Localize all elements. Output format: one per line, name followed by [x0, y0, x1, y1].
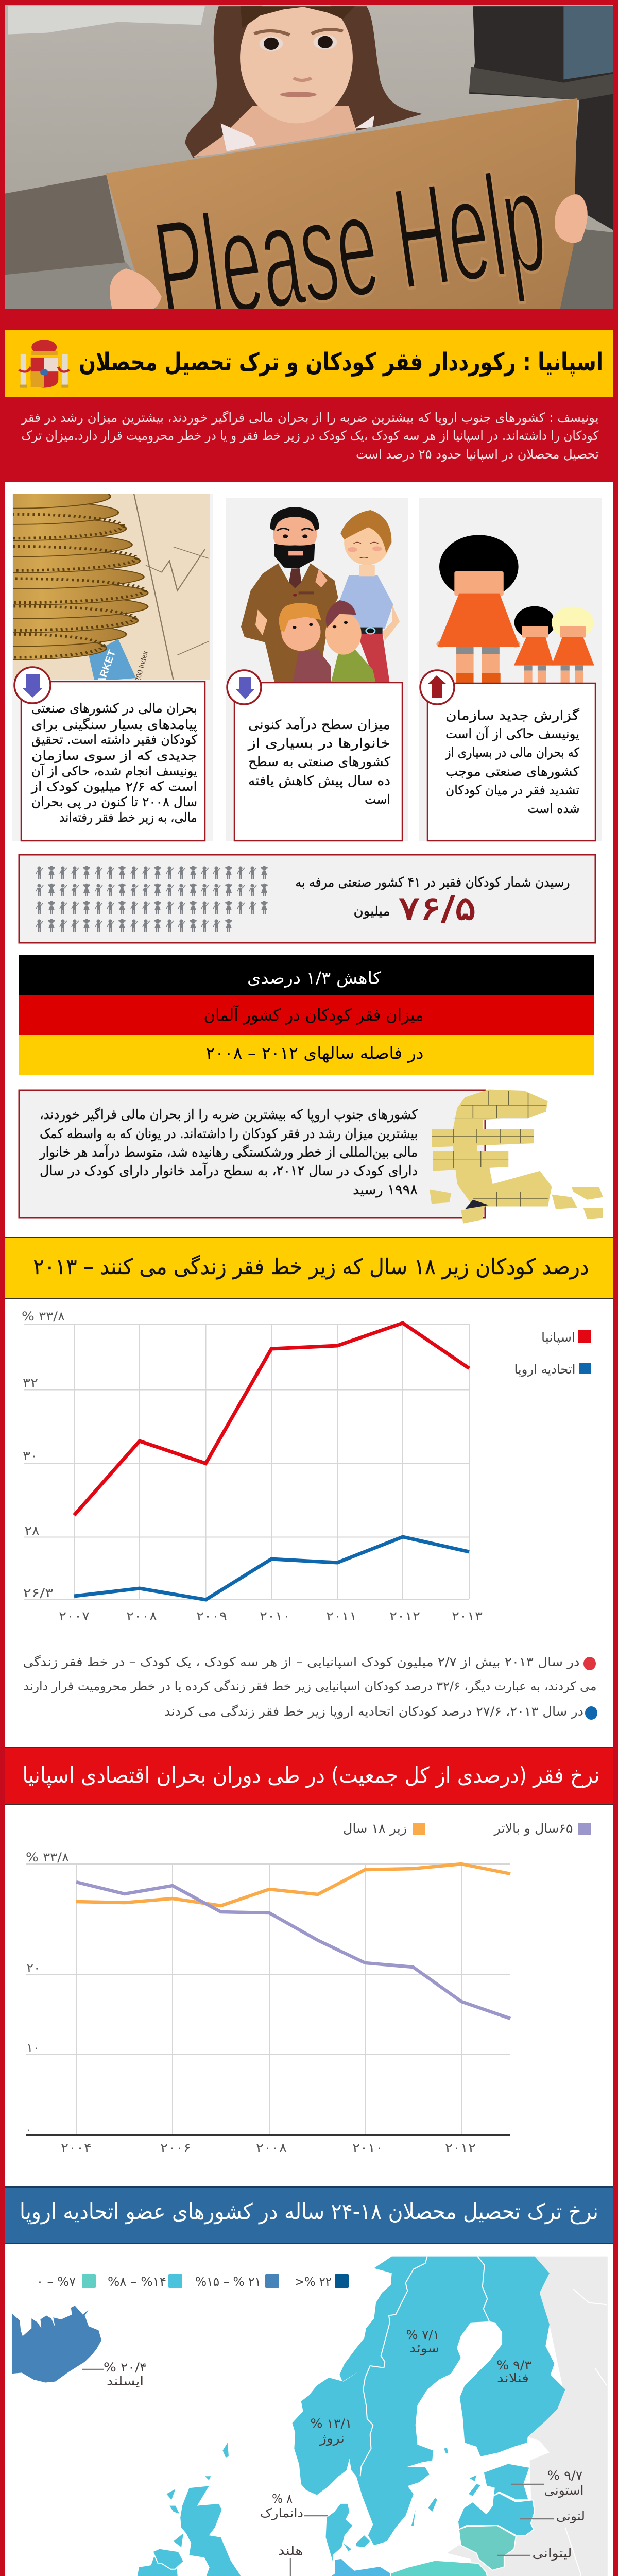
icon: mother body	[357, 634, 390, 683]
series: EU	[74, 1537, 469, 1600]
line chart: poverty rate by age	[26, 1821, 591, 2155]
chart notes: می کردند، به عبارت دیگر، ۳۲/۶ درصد کودکان اسپانیایی زیر خط فقر زندگی کرده یا در خطر محرومیت قرار دارند	[24, 1679, 596, 1693]
y axis labels: ۲۰	[27, 1961, 40, 1975]
section header: poverty rate in Spain	[5, 1747, 613, 1805]
paragraph: یونیسف انجام شده، حاکی از آن	[31, 763, 197, 778]
y axis labels: % ۳۳/۸	[26, 1850, 69, 1865]
panel: family income	[226, 498, 408, 841]
text box	[427, 683, 595, 841]
leader lines	[82, 2369, 554, 2576]
icon: father head	[273, 514, 317, 554]
icon: up arrow in circle	[420, 670, 454, 704]
icon: lower pavement	[5, 262, 162, 311]
paragraph: کشورهای صنعتی به سطح	[248, 754, 390, 770]
flag text three: در فاصله سالهای ۲۰۱۲ – ۲۰۰۸	[205, 1043, 423, 1063]
icon: rock step	[469, 67, 615, 100]
chart notes: در سال ۲۰۱۳ بیش از ۲/۷ میلیون کودک اسپانیایی – از هر سه کودک ، یک کودک – در خط فقر زندگی	[23, 1655, 580, 1669]
paragraph: تشدید فقر در میان کودکان	[445, 783, 579, 798]
icon: hair	[185, 6, 422, 158]
x axis labels	[61, 2141, 476, 2155]
paragraph: کشورهای صنعتی موجب	[445, 764, 579, 779]
legend: ۶۵سال و بالاتر	[493, 1821, 573, 1836]
label: Lithuania: لیتوانی	[533, 2546, 572, 2561]
country: United Kingdom	[166, 2443, 259, 2576]
border: Norway Sweden	[360, 2257, 427, 2476]
paragraph: پیامدهای بسیار سنگینی برای	[31, 717, 197, 732]
label: Estonia	[544, 2468, 584, 2498]
x axis labels: ۲۰۰۹	[196, 1609, 227, 1623]
panel: coins and financial crisis	[0, 484, 213, 841]
paragraph	[247, 717, 390, 807]
section header: children under 18: درصد کودکان زیر ۱۸ سال که زیر خط فقر زندگی می کنند – ۲۰۱۳	[33, 1254, 589, 1279]
x axis labels: ۲۰۰۸	[256, 2141, 287, 2155]
country: Poland	[389, 2561, 490, 2576]
legend	[37, 2274, 349, 2289]
icon: red bullet	[583, 1657, 596, 1670]
pictogram: rows of children	[36, 866, 268, 932]
chart notes	[23, 1655, 597, 1720]
paragraph: بیشترین میزان رشد در فقر کودکان را داشته‌اند. در یونان که به واسطه کمک	[40, 1126, 418, 1142]
icon: down arrow in circle	[14, 667, 50, 703]
photo: coins on newspaper: MARKET	[92, 649, 118, 694]
paragraph: مالی، به زیر خط فقر رفته‌اند	[60, 810, 197, 825]
map: non-member land	[150, 2257, 608, 2576]
text box	[234, 683, 402, 841]
y axis labels: % ۳۳/۸	[22, 1309, 65, 1324]
y axis labels: ۰	[26, 2123, 31, 2137]
icon: left hand	[110, 268, 162, 311]
stat unit: میلیون	[353, 904, 390, 919]
icon: boy two	[331, 649, 376, 683]
icon: eyes and mouth	[254, 29, 343, 97]
chart grid	[24, 1324, 469, 1599]
x axis labels: ۲۰۱۰	[260, 1609, 290, 1623]
label: Netherlands: هلند	[278, 2544, 303, 2558]
icon: curb	[5, 175, 126, 275]
icon: child with blond hair	[552, 607, 594, 638]
icon: right hand	[555, 194, 588, 243]
map: inland lakes and borders	[555, 2289, 607, 2576]
paragraph: است	[365, 792, 390, 807]
label: Denmark: % ۸	[272, 2492, 293, 2506]
icon: fringe	[241, 6, 355, 28]
icon: mother figure	[439, 535, 519, 599]
label: Norway	[310, 2416, 352, 2446]
paragraph	[444, 708, 580, 816]
icon: crumbling euro of bricks	[430, 1089, 603, 1224]
x axis labels: ۲۰۱۰	[352, 2141, 383, 2155]
paragraph: گزارش جدید سازمان	[445, 708, 579, 723]
label: Sweden	[406, 2328, 440, 2355]
label: Norway: % ۱۳/۱	[310, 2416, 352, 2431]
country: Estonia	[484, 2463, 530, 2500]
section header: school dropout rate	[5, 2186, 613, 2244]
country: Finland	[460, 2257, 565, 2456]
section header: school dropout rate: نرخ ترک تحصیل محصلان ۱۸-۲۴ ساله در کشورهای عضو اتحادیه اروپا	[20, 2199, 598, 2225]
paragraph: جدیدی که از سوی سازمان	[31, 748, 197, 763]
icon: down arrow in circle	[227, 670, 261, 704]
icon: boy one	[293, 649, 331, 683]
legend	[343, 1821, 591, 1836]
paragraph: ده سال پیش کاهش یافته	[248, 773, 390, 788]
legend	[514, 1330, 591, 1377]
y axis labels: ۲۸	[25, 1523, 40, 1538]
x axis labels: ۲۰۱۱	[326, 1609, 357, 1623]
icon: blue bullet	[585, 1706, 597, 1720]
stat caption: رسیدن شمار کودکان فقیر در ۴۱ کشور صنعتی مرفه به	[296, 875, 570, 890]
intro paragraph	[21, 410, 599, 462]
paragraph: کشورهای جنوب اروپا که بیشترین ضربه را از بحران مالی فراگیر خوردند،	[40, 1107, 418, 1123]
label: Finland	[496, 2358, 531, 2385]
illustration: mother and two children	[436, 535, 594, 683]
label: Norway: نروژ	[319, 2431, 345, 2446]
paragraph: دارای کودک در سال ۲۰۱۲، به سطح درآمد خانوار دارای کودک در سال	[40, 1162, 418, 1179]
icon: neck	[193, 106, 357, 157]
icon: cardboard sign	[106, 98, 577, 311]
y axis labels: ۲۶/۳	[23, 1586, 54, 1600]
y axis labels	[22, 1309, 65, 1600]
paragraph	[39, 1107, 418, 1198]
icon: rock blue side	[563, 6, 615, 80]
label: Finland: فنلاند	[497, 2371, 529, 2385]
x axis labels: ۲۰۰۴	[61, 2141, 92, 2155]
paragraph: میزان سطح درآمد کنونی	[248, 717, 390, 733]
label: Denmark	[260, 2492, 303, 2520]
border: Sweden Finland	[477, 2257, 489, 2321]
label: Iceland: ایسلند	[107, 2374, 144, 2388]
y axis labels: ۱۰	[27, 2041, 39, 2055]
photo: coins on newspaper	[13, 494, 210, 680]
series: under 18	[76, 1864, 510, 1906]
legend: ۰ – %۷	[37, 2275, 76, 2289]
x axis labels	[59, 1609, 483, 1623]
icon: light patch on pavement	[8, 6, 205, 35]
country: Denmark	[326, 2504, 370, 2561]
y axis labels: ۳۲	[23, 1376, 38, 1390]
paragraph: یونیسف حاکی از آن است	[445, 726, 579, 741]
icon: shirt	[221, 115, 374, 151]
paragraph: بحران مالی در کشورهای صنعتی	[31, 701, 197, 716]
label: Denmark: دانمارک	[260, 2506, 303, 2520]
label: Sweden: % ۷/۱	[406, 2328, 440, 2342]
text box	[21, 682, 205, 841]
islands: Baltic	[411, 2448, 480, 2526]
icon: mother head	[344, 520, 390, 565]
x axis labels: ۲۰۱۳	[452, 1609, 483, 1623]
panel: 76.5 million poor children	[19, 855, 595, 943]
legend: زیر ۱۸ سال	[343, 1821, 407, 1836]
icon: father coat	[241, 563, 338, 683]
panel: Germany flag statistic	[19, 955, 594, 1075]
hero photo: girl holding Please Help sign	[5, 5, 613, 309]
label: Iceland	[104, 2360, 147, 2388]
legend: >% ۲۲	[295, 2275, 332, 2289]
series: Spain	[74, 1323, 469, 1515]
photo: coins on newspaper: ASX 200 Index	[129, 650, 149, 699]
line chart: children in poverty Spain vs EU	[22, 1309, 591, 1623]
country: Norway and Sweden	[292, 2257, 489, 2545]
legend: %۸ – %۱۴	[108, 2275, 166, 2289]
y axis labels	[26, 1850, 69, 2137]
y axis labels: ۳۰	[23, 1449, 38, 1463]
paragraph: شده است	[527, 801, 580, 816]
intro paragraph: تحصیل محصلان در اسپانیا حدود ۲۵ درصد است	[356, 447, 599, 462]
paragraph: خانوارها در بسیاری از	[247, 736, 390, 751]
icon: Spanish coat of arms	[19, 340, 70, 388]
title banner	[5, 330, 613, 397]
icon: right pavement	[560, 229, 613, 309]
flag text two: میزان فقر کودکان در کشور آلمان	[204, 1005, 423, 1025]
paragraph: که بحران مالی در بسیاری از	[444, 745, 579, 760]
icon: face	[240, 0, 353, 123]
map: school dropout in Europe	[12, 2257, 608, 2576]
paragraph: کودکان فقیر داشته است. تحقیق	[31, 732, 197, 747]
panel: southern Europe note with euro bricks	[19, 1089, 603, 1224]
label: Estonia: استونی	[544, 2483, 584, 2498]
x axis labels: ۲۰۱۲	[389, 1609, 420, 1623]
x axis labels: ۲۰۰۶	[160, 2141, 191, 2155]
x axis labels: ۲۰۰۷	[59, 1609, 90, 1623]
paragraph	[30, 701, 197, 825]
intro paragraph: یونیسف : کشورهای جنوب اروپا که بیشترین ضربه را از بحران مالی فراگیر خوردند، بیشترین میزان رشد در فقر	[21, 410, 599, 426]
x axis labels: ۲۰۰۸	[126, 1609, 157, 1623]
section header: children under 18	[5, 1237, 613, 1299]
country: Germany	[303, 2558, 397, 2576]
chart grid	[26, 1864, 510, 2135]
country: Latvia	[458, 2493, 535, 2535]
legend: اسپانیا	[541, 1330, 575, 1345]
paragraph: مالی بین‌المللی از خطر ورشکستگی رهانیده شد، متوسط درآمد هر خانوار	[39, 1144, 418, 1160]
panel: UNICEF report	[419, 498, 602, 841]
x axis labels: ۲۰۱۲	[445, 2141, 476, 2155]
flag text one: کاهش ۱/۳ درصدی	[247, 968, 382, 988]
series: 65 and over	[76, 1882, 510, 2019]
label: Iceland: % ۲۰/۴	[104, 2360, 147, 2375]
stat number: ۷۶/۵	[399, 890, 476, 928]
label: Latvia: لتونی	[556, 2509, 585, 2523]
icon: child with black hair	[514, 606, 555, 639]
illustration: family	[241, 507, 400, 683]
paragraph: ۱۹۹۸ رسید	[353, 1182, 418, 1198]
label: Sweden: سوئد	[409, 2341, 439, 2355]
label: Estonia: % ۹/۷	[547, 2468, 583, 2483]
country: Ireland	[133, 2549, 184, 2576]
legend: %۱۵ – % ۲۱	[195, 2275, 261, 2289]
legend: اتحادیه اروپا	[514, 1362, 576, 1377]
country: Lithuania	[459, 2526, 516, 2570]
chart notes: در سال ۲۰۱۳، ۲۷/۶ درصد کودکان اتحادیه اروپا زیر خط فقر زندگی می کردند	[164, 1704, 583, 1719]
country: Iceland	[12, 2306, 101, 2382]
paragraph: سال ۲۰۰۸ تا کنون در پی بحران	[31, 794, 197, 809]
icon: dark rock	[469, 6, 615, 231]
label: Finland: % ۹/۳	[496, 2358, 531, 2372]
paragraph: است که ۲/۶ میلیون کودک از	[30, 779, 197, 794]
